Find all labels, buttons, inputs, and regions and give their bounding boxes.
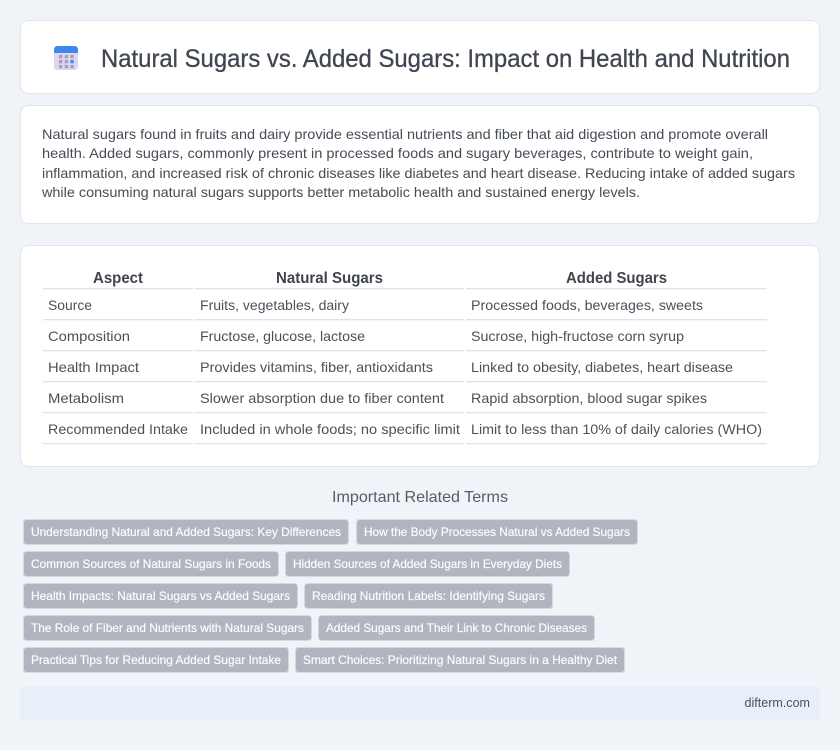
table row: health impact: Linked to obesity, diabetes, heart disease (471, 359, 733, 375)
text block: summary (41, 126, 795, 200)
tag list (24, 520, 638, 672)
table row: recommended intake: Recommended Intake (48, 421, 188, 437)
icon: calendar (54, 46, 78, 70)
tag 2: How the Body Processes Natural vs Added Sugars (364, 525, 630, 539)
footer (20, 686, 820, 720)
table row: metabolism: Rapid absorption, blood sugar spikes (471, 390, 707, 406)
tag 5: Health Impacts: Natural Sugars vs Added Sugars (31, 589, 290, 603)
panel: comparison table (20, 246, 820, 466)
title: Natural Sugars vs. Added Sugars: Impact on Health and Nutrition (101, 45, 790, 73)
text block: summary: Natural sugars found in fruits and dairy provide essential nutrients and fiber that aid digestion and promote overall (42, 126, 768, 142)
table header: Added Sugars (566, 270, 667, 287)
text block: summary: health. Added sugars, commonly present in processed foods and sugary beverages, contribute to weight gain, (42, 145, 753, 161)
tag 3: Common Sources of Natural Sugars in Foods (31, 557, 271, 571)
tag 3 (24, 552, 278, 576)
tag 5 (24, 584, 298, 608)
tag 4: Hidden Sources of Added Sugars in Everyday Diets (293, 557, 562, 571)
heading: related terms: Important Related Terms (332, 489, 508, 506)
table row: composition: Sucrose, high-fructose corn syrup (471, 328, 684, 344)
table row: composition: Composition (48, 328, 130, 344)
table row: composition (48, 328, 684, 344)
table row: health impact: Provides vitamins, fiber, antioxidants (200, 359, 433, 375)
table header (93, 270, 667, 287)
tag 1 (24, 520, 348, 544)
table row: source: Fruits, vegetables, dairy (200, 297, 349, 313)
table header: Natural Sugars (276, 270, 383, 287)
table header: Aspect (93, 270, 143, 287)
tag 10 (296, 648, 624, 672)
tag 8: Added Sugars and Their Link to Chronic Diseases (326, 621, 587, 635)
panel: title header (20, 20, 820, 94)
tag 9 (24, 648, 288, 672)
panel: summary paragraph (20, 106, 820, 224)
tag 1: Understanding Natural and Added Sugars: Key Differences (31, 525, 341, 539)
footer link text: difterm.com (744, 695, 810, 710)
table row: metabolism: Slower absorption due to fiber content (200, 390, 444, 406)
table row: recommended intake: Limit to less than 10% of daily calories (WHO) (471, 421, 762, 437)
table row: source: Source (48, 297, 92, 313)
table row: metabolism (48, 390, 707, 406)
tag 4 (286, 552, 570, 576)
tag 6 (304, 584, 552, 608)
tag 7 (24, 616, 312, 640)
tag 7: The Role of Fiber and Nutrients with Natural Sugars (31, 621, 304, 635)
tag 10: Smart Choices: Prioritizing Natural Sugars in a Healthy Diet (303, 653, 618, 667)
tag 6: Reading Nutrition Labels: Identifying Sugars (312, 589, 545, 603)
table row: health impact: Health Impact (48, 359, 139, 375)
text block: summary: while consuming natural sugars supports better metabolic health and sustained energy levels. (41, 184, 640, 200)
table rules (43, 288, 767, 444)
table row: source (48, 297, 703, 313)
tag 2 (356, 520, 638, 544)
tag 8 (318, 616, 594, 640)
table row: metabolism: Metabolism (48, 390, 124, 406)
table row: health impact (48, 359, 733, 375)
text block: summary: inflammation, and increased risk of chronic diseases like diabetes and heart disease. Reducing intake of added sugars (42, 165, 795, 181)
table row: source: Processed foods, beverages, sweets (471, 297, 703, 313)
table row: composition: Fructose, glucose, lactose (200, 328, 365, 344)
table row: recommended intake: Included in whole foods; no specific limit (200, 421, 460, 437)
tag 9: Practical Tips for Reducing Added Sugar Intake (31, 653, 281, 667)
table row: recommended intake (48, 421, 762, 437)
